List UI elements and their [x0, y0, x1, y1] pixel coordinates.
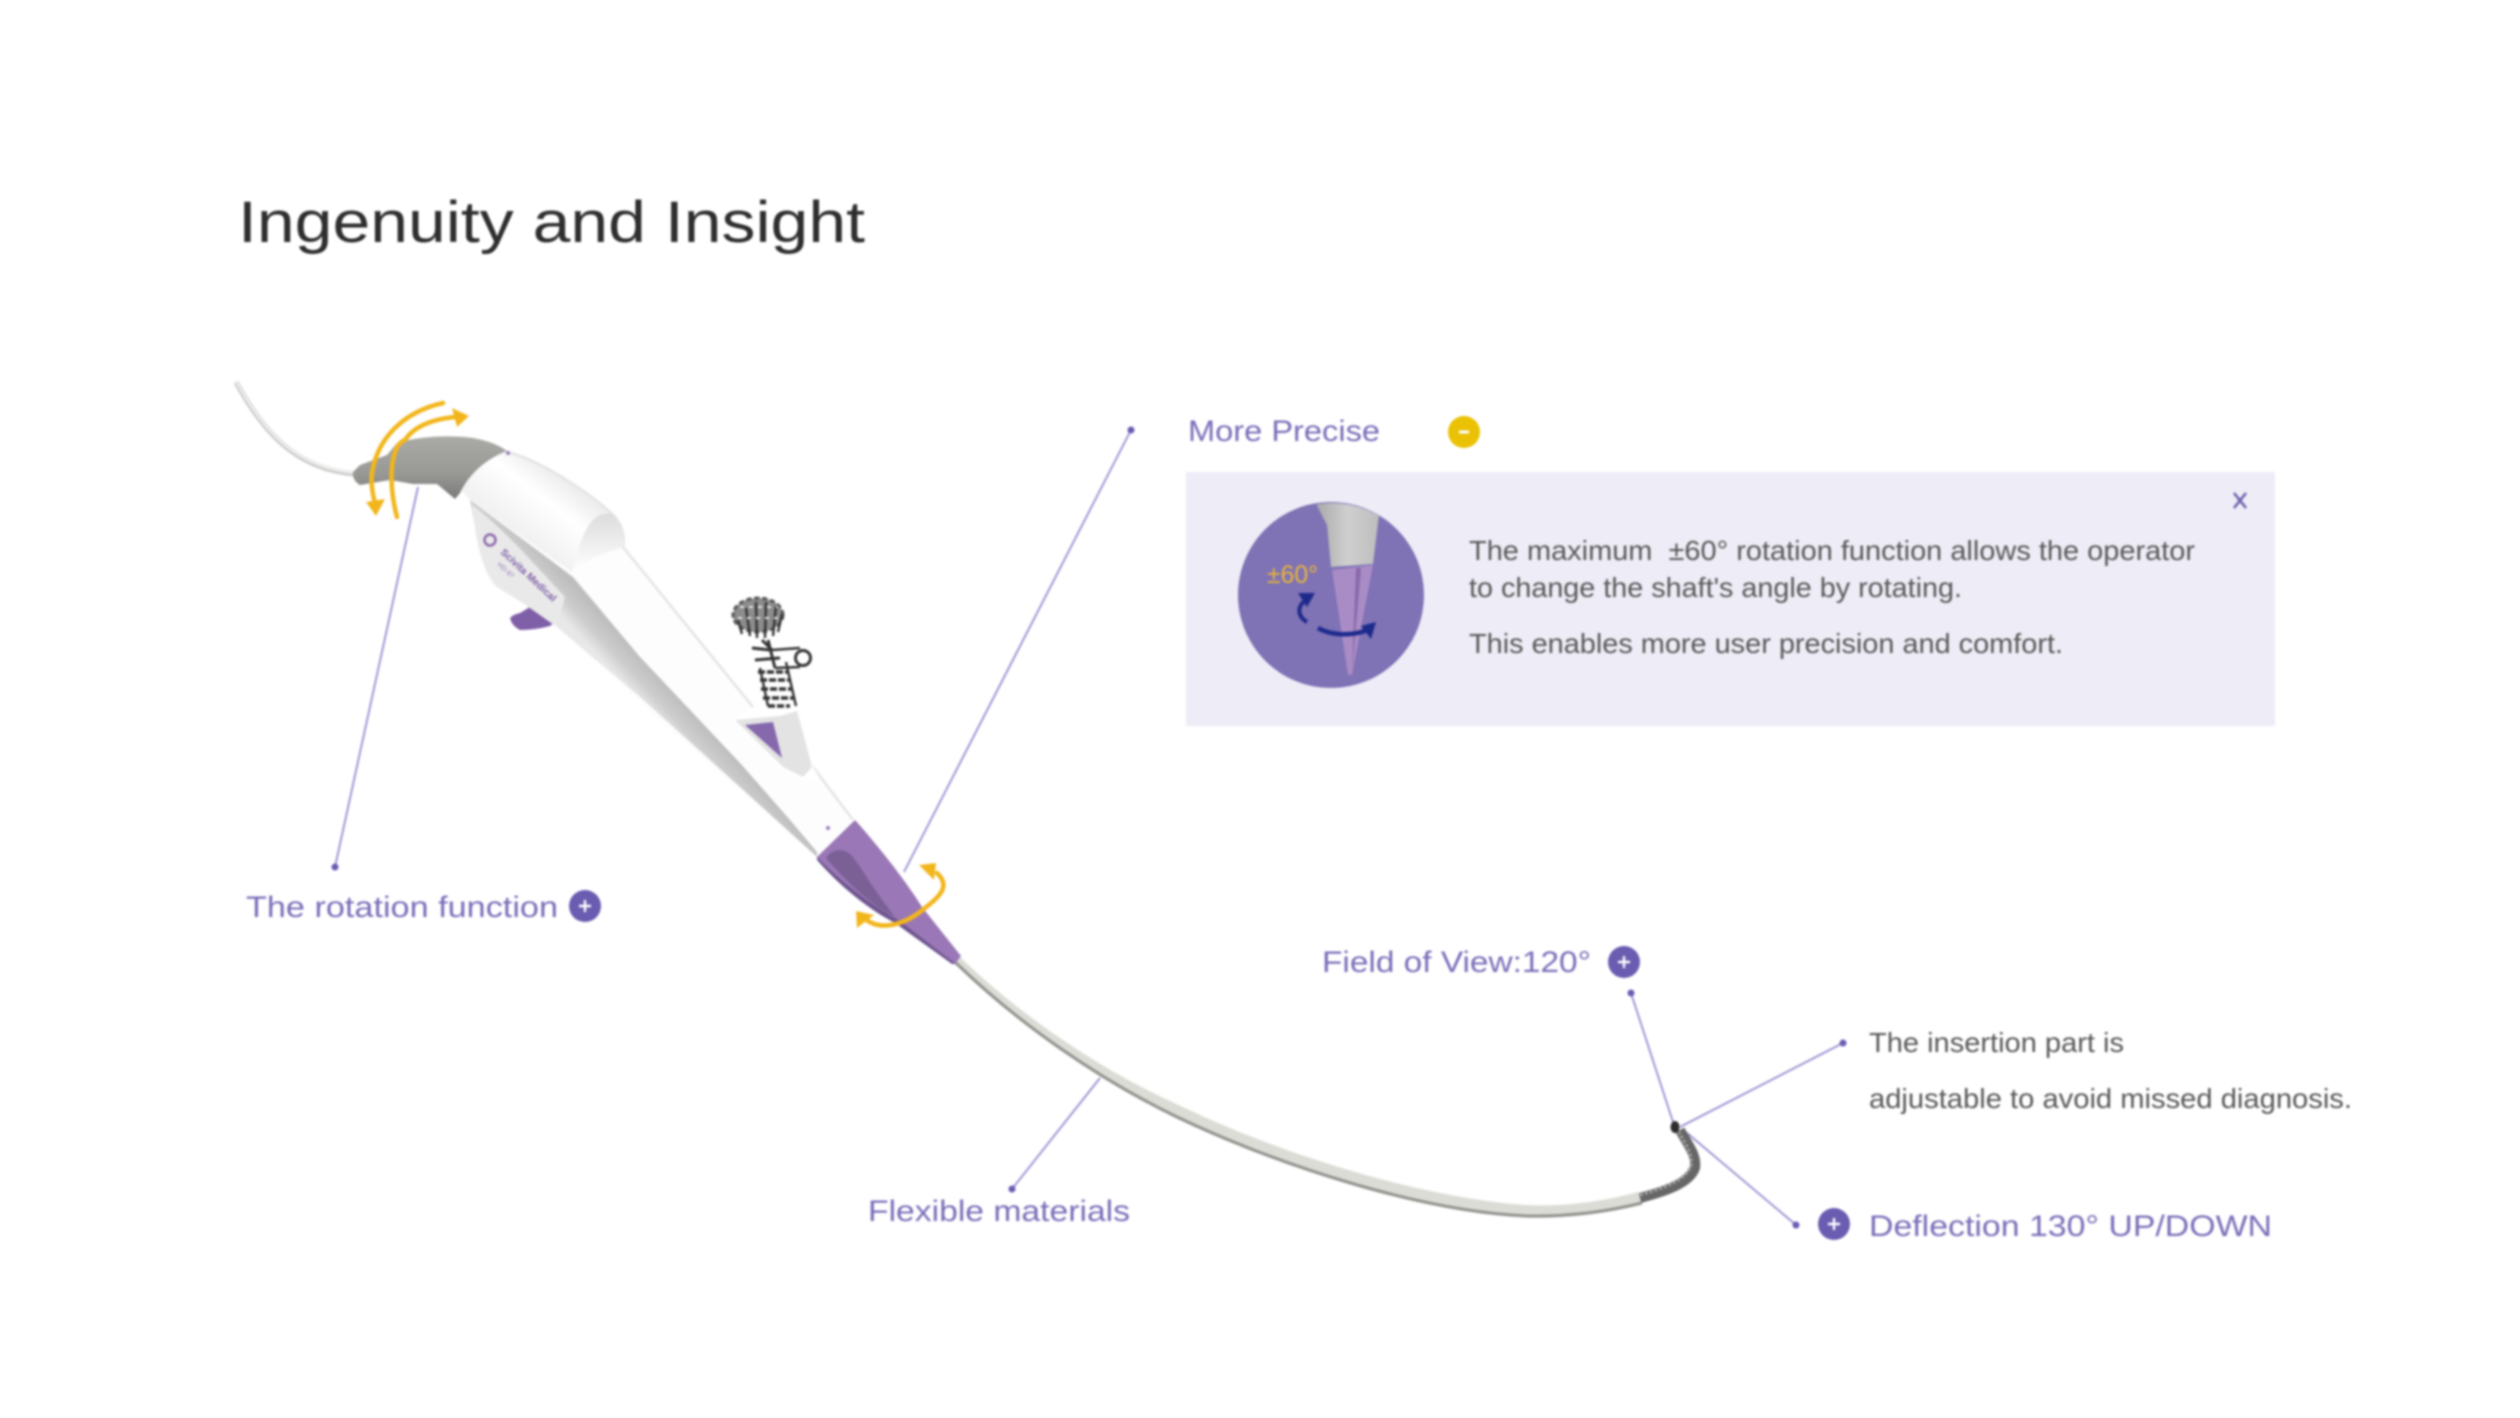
panel: more precise details — [1186, 472, 2275, 726]
lever — [510, 607, 555, 630]
icon: expand plus — [569, 890, 601, 922]
purple cone — [817, 820, 961, 964]
note: insertion part — [1869, 1027, 2352, 1114]
valve sketch — [733, 598, 810, 706]
port fitting — [732, 707, 822, 782]
flexible shaft — [956, 957, 1642, 1217]
logo: Scivita Medical — [498, 547, 558, 604]
cable — [236, 382, 356, 474]
icon: collapse minus — [1448, 416, 1480, 448]
panel text: This enables more user precision and comfort. — [1469, 628, 2063, 659]
device illustration — [236, 381, 1695, 1217]
side logo panel — [472, 505, 565, 627]
upper rotation arrows — [366, 403, 469, 517]
icon: expand plus — [1608, 946, 1640, 978]
grey underside band — [470, 500, 817, 857]
grey strain relief — [353, 436, 507, 499]
panel text: The maximum ±60° rotation function allows the operator — [1469, 535, 2195, 566]
label: deflection: Deflection 130° UP/DOWN — [1869, 1210, 2272, 1243]
label: field of view: Field of View:120° — [1322, 946, 1591, 979]
label: more precise — [1188, 415, 1480, 448]
logo — [484, 534, 558, 604]
note: insertion part: The insertion part is — [1869, 1027, 2124, 1058]
lower rotation arrow — [856, 863, 943, 928]
icon: close — [2234, 493, 2246, 508]
top band shade — [458, 452, 610, 572]
handle edge shading — [507, 452, 853, 820]
distal tip — [1670, 1121, 1680, 1133]
panel text: to change the shaft's angle by rotating. — [1469, 572, 1962, 603]
purple marks — [506, 451, 830, 830]
logo: HD-97 — [496, 561, 515, 580]
label: more precise: More Precise — [1188, 415, 1380, 448]
rotation diagram: ±60° — [1267, 561, 1318, 589]
infographic canvas — [234, 198, 2351, 1242]
callout lines — [332, 426, 1846, 1228]
title: Ingenuity and Insight — [238, 190, 865, 255]
bending section — [1640, 1130, 1695, 1198]
cone inset — [826, 850, 895, 917]
label: flexible materials: Flexible materials — [868, 1195, 1130, 1228]
handle body — [458, 452, 853, 857]
note: insertion part: adjustable to avoid missed diagnosis. — [1869, 1083, 2352, 1114]
purple triangle — [745, 722, 782, 758]
label: rotation function: The rotation function — [246, 891, 558, 924]
rotation diagram — [1238, 500, 1424, 688]
icon: expand plus — [1818, 1208, 1850, 1240]
panel text — [1469, 535, 2195, 659]
grip scoop — [572, 513, 624, 572]
